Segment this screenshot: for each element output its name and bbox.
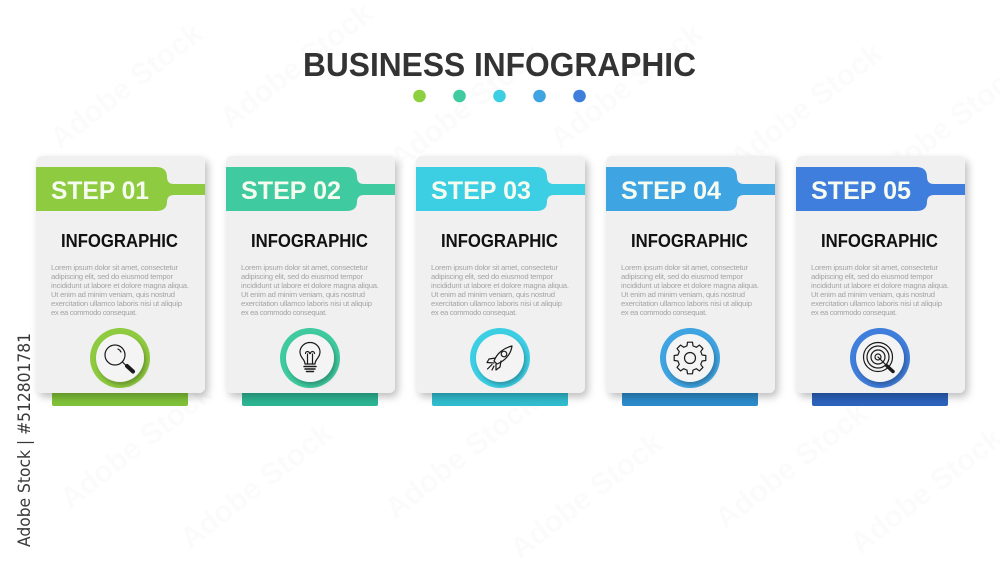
- body text: [241, 263, 379, 317]
- panel: step 03: [416, 156, 585, 406]
- card: [416, 156, 585, 393]
- step header: [416, 167, 585, 211]
- bottom bar: [812, 388, 948, 406]
- step label: STEP 05: [811, 177, 911, 205]
- body text: incididunt ut labore et dolore magna aliqua.: [621, 281, 759, 290]
- body text: adipiscing elit, sed do eiusmod tempor: [241, 272, 363, 281]
- body text: [621, 263, 759, 317]
- card: [796, 156, 965, 393]
- step header: [36, 167, 205, 211]
- step label: STEP 02: [241, 177, 341, 205]
- body text: Ut enim ad minim veniam, quis nostrud: [51, 290, 175, 299]
- body text: exercitation ullamco laboris nisi ut aliquip: [241, 299, 372, 308]
- body text: incididunt ut labore et dolore magna aliqua.: [811, 281, 949, 290]
- body text: exercitation ullamco laboris nisi ut aliquip: [51, 299, 182, 308]
- step label: STEP 04: [621, 177, 721, 205]
- icon: target: [850, 328, 910, 388]
- body text: exercitation ullamco laboris nisi ut aliquip: [621, 299, 752, 308]
- heading: INFOGRAPHIC: [821, 231, 938, 251]
- icon: light bulb: [280, 328, 340, 388]
- bottom bar: [242, 388, 378, 406]
- body text: adipiscing elit, sed do eiusmod tempor: [431, 272, 553, 281]
- stock id label: Adobe Stock | #512801781: [15, 333, 34, 547]
- body text: Ut enim ad minim veniam, quis nostrud: [621, 290, 745, 299]
- panel: step 02: [226, 156, 395, 406]
- body text: exercitation ullamco laboris nisi ut aliquip: [431, 299, 562, 308]
- step label: STEP 03: [431, 177, 531, 205]
- body text: ex ea commodo consequat.: [431, 308, 517, 317]
- bottom bar: [432, 388, 568, 406]
- panel: step 05: [796, 156, 965, 406]
- body text: incididunt ut labore et dolore magna aliqua.: [431, 281, 569, 290]
- body text: [431, 263, 569, 317]
- icon: gear: [660, 328, 720, 388]
- card: [36, 156, 205, 393]
- body text: ex ea commodo consequat.: [241, 308, 327, 317]
- heading: INFOGRAPHIC: [251, 231, 368, 251]
- icon: rocket: [470, 328, 530, 388]
- body text: adipiscing elit, sed do eiusmod tempor: [621, 272, 743, 281]
- card: [226, 156, 395, 393]
- panel: step 01: [36, 156, 205, 406]
- body text: Lorem ipsum dolor sit amet, consectetur: [51, 263, 178, 272]
- body text: incididunt ut labore et dolore magna aliqua.: [241, 281, 379, 290]
- bottom bar: [622, 388, 758, 406]
- body text: ex ea commodo consequat.: [51, 308, 137, 317]
- heading: INFOGRAPHIC: [61, 231, 178, 251]
- step header: [796, 167, 965, 211]
- body text: ex ea commodo consequat.: [811, 308, 897, 317]
- step header: [226, 167, 395, 211]
- body text: Lorem ipsum dolor sit amet, consectetur: [241, 263, 368, 272]
- body text: Ut enim ad minim veniam, quis nostrud: [811, 290, 935, 299]
- card: [606, 156, 775, 393]
- heading: INFOGRAPHIC: [631, 231, 748, 251]
- bottom bar: [52, 388, 188, 406]
- step header: [606, 167, 775, 211]
- body text: Ut enim ad minim veniam, quis nostrud: [431, 290, 555, 299]
- body text: adipiscing elit, sed do eiusmod tempor: [51, 272, 173, 281]
- body text: adipiscing elit, sed do eiusmod tempor: [811, 272, 933, 281]
- body text: Lorem ipsum dolor sit amet, consectetur: [811, 263, 938, 272]
- body text: incididunt ut labore et dolore magna aliqua.: [51, 281, 189, 290]
- panel: step 04: [606, 156, 775, 406]
- icon: magnifier: [90, 328, 150, 388]
- body text: ex ea commodo consequat.: [621, 308, 707, 317]
- title: BUSINESS INFOGRAPHIC: [303, 47, 696, 84]
- body text: [811, 263, 949, 317]
- body text: exercitation ullamco laboris nisi ut aliquip: [811, 299, 942, 308]
- body text: [51, 263, 189, 317]
- body text: Lorem ipsum dolor sit amet, consectetur: [621, 263, 748, 272]
- step label: STEP 01: [51, 177, 149, 205]
- body text: Lorem ipsum dolor sit amet, consectetur: [431, 263, 558, 272]
- body text: Ut enim ad minim veniam, quis nostrud: [241, 290, 365, 299]
- progress dots: [413, 90, 586, 102]
- heading: INFOGRAPHIC: [441, 231, 558, 251]
